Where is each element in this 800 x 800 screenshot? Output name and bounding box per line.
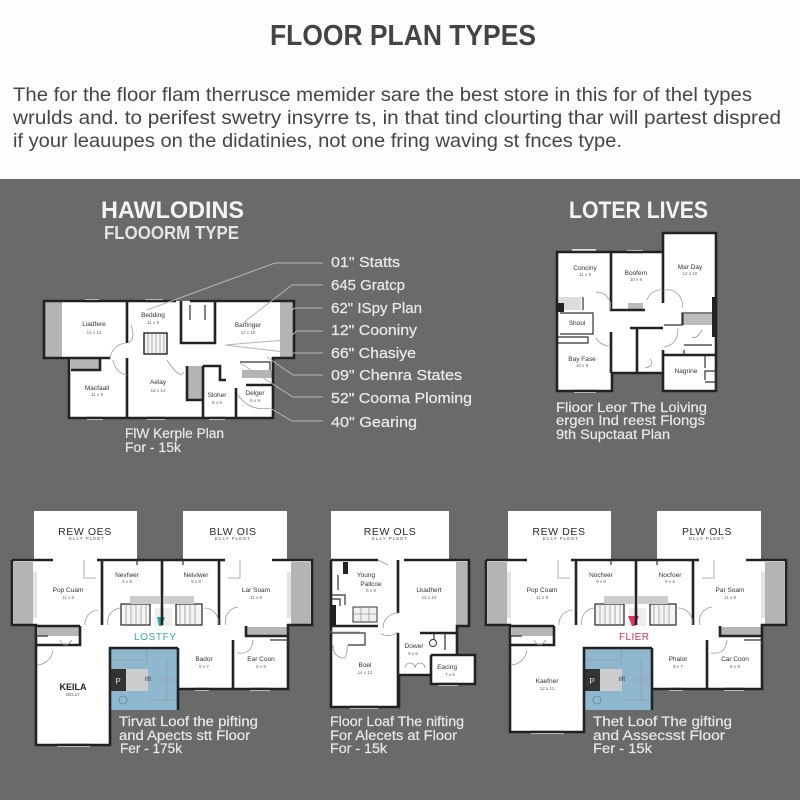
- floor plan: Loter Lives: Shoul: [569, 320, 586, 327]
- caption: Loter Lives plan: Flioor Leor The Loiving: [556, 400, 707, 415]
- floor plan: Lostfy double: Pop Cuam: [53, 587, 83, 594]
- floor plan: Loter Lives: Nagrine: [675, 368, 698, 375]
- floor plan: Pewols single: Young: [357, 572, 375, 579]
- floor plan: Hawlodins: 14 x 12: [87, 330, 102, 335]
- floor plan: Hawlodins: Macfaall: [85, 385, 110, 392]
- caption: Pewols plan: [330, 714, 464, 756]
- floor plan: Flier double: ELLY PLEET: [689, 536, 725, 541]
- floor plan: Flier double: REW DES: [532, 526, 586, 538]
- callout labels: 645 Gratcp: [331, 277, 405, 294]
- callout labels: 01" Statts: [331, 254, 400, 271]
- floor plan: Lostfy double: REW OES: [58, 526, 112, 538]
- callout labels: 52" Cooma Ploming: [331, 390, 472, 407]
- floor plan: Hawlodins: Sloher: [208, 392, 227, 399]
- floor plan: Pewols single: Eacing: [437, 664, 457, 671]
- intro text: if your leauupes on the didatinies, not one fring waving st fnces type.: [13, 130, 622, 152]
- floor plan: Hawlodins: [44, 299, 294, 420]
- callout labels: 09" Chenra States: [331, 367, 462, 384]
- caption: Lostfy plan: Fer - 175k: [120, 741, 182, 756]
- intro text: The for the floor flam therrusce memider sare the best store in this for of thel types: [13, 84, 752, 106]
- floor plan: Flier double: Phalor: [669, 656, 688, 663]
- floor plan: Lostfy double: KEILA: [60, 682, 87, 692]
- intro text: [12, 84, 781, 152]
- floor plan: Loter Lives: Bay Fase: [568, 356, 596, 363]
- floor plan: Flier double: 9 x 8: [596, 579, 606, 584]
- floor plan: Loter Lives: Boofern: [625, 270, 648, 277]
- caption: Hawlodins plan: FlW Kerple Plan: [125, 426, 224, 441]
- caption: Pewols plan: For - 15k: [330, 741, 387, 756]
- callout labels: 62" ISpy Plan: [331, 300, 422, 317]
- floor plan: Flier double: Pop Coam: [527, 587, 557, 594]
- floor plan: Pewols single: ELLY PLEET: [372, 536, 408, 541]
- floor plan: Flier double: ELLY PLEET: [543, 536, 579, 541]
- floor plan: Lostfy double: [12, 511, 312, 747]
- floor plan: Hawlodins: Aelay: [150, 379, 167, 386]
- caption: Flier plan: Fer - 15k: [593, 741, 652, 756]
- floor plan: Hawlodins: 12 x 14: [151, 388, 166, 393]
- floor plan: Loter Lives: [557, 233, 716, 393]
- floor plan: Lostfy double: 8 x 9: [256, 664, 266, 669]
- heading: Loter Lives: LOTER LIVES: [569, 197, 708, 224]
- floor plan: Loter Lives: 10 x 9: [576, 363, 589, 368]
- caption: Lostfy plan: [119, 714, 258, 756]
- caption: Flier plan: Thet Loof The gifting: [593, 714, 732, 729]
- floor plan: Flier double: 8 x 7: [673, 664, 683, 669]
- floor plan: Pewols single: Dower: [405, 643, 424, 650]
- caption: Loter Lives plan: 9th Supctaat Plan: [556, 427, 670, 442]
- floor plan: Pewols single: REW OLS: [364, 526, 416, 538]
- floor plan: Flier double: 11 x 9: [724, 595, 736, 600]
- icon: red marker: [628, 616, 639, 626]
- floor plan: Flier double: PLW OLS: [682, 526, 732, 538]
- callout lines: [147, 263, 323, 421]
- floor plan: Flier double: 8 x 9: [730, 664, 740, 669]
- floor plan: Flier double: Nocfwer: [589, 572, 614, 579]
- floor plan: Hawlodins: 8 x 6: [212, 400, 222, 405]
- caption: Pewols plan: For Alecets at Floor: [330, 728, 458, 743]
- floor plan: Flier double: 12 x 11: [540, 686, 555, 691]
- label: Flier: FLIER: [619, 632, 649, 643]
- floor plan: Pewols single: Pallcoe: [360, 581, 382, 588]
- caption: Loter Lives plan: [556, 400, 707, 442]
- floor plan: Pewols single: 8 x 6: [408, 651, 418, 656]
- floor plan: Hawlodins: 8 x 9: [250, 398, 260, 403]
- floor plan: Flier double: 11 x 9: [536, 595, 548, 600]
- floor plan: Lostfy double: Bador: [195, 656, 214, 663]
- floor plan: Lostfy double: BLW OIS: [209, 526, 257, 538]
- floor plan: Hawlodins: Delger: [245, 390, 265, 397]
- floor plan: Flier double: [486, 511, 786, 734]
- floor plan: Loter Lives: Conclny: [573, 265, 597, 272]
- caption: Lostfy plan: Tirvat Loof the pifting: [119, 714, 258, 729]
- floor plan: Lostfy double: BELLY: [66, 692, 80, 697]
- floor plan: Lostfy double: 9 x 8: [122, 579, 132, 584]
- floor plan: Hawlodins: 12 x 10: [241, 330, 256, 335]
- icon: teal marker: [157, 617, 165, 626]
- floor plan: Flier double: Kaefner: [536, 678, 559, 685]
- title: FLOOR PLAN TYPES: [270, 20, 536, 52]
- floor plan: Lostfy double: 8 x 7: [199, 664, 209, 669]
- floor plan: Loter Lives: 10 x 9: [630, 277, 643, 282]
- caption: Lostfy plan: and Apects stt Floor: [119, 728, 251, 743]
- floor plan: Hawlodins: Bedding: [141, 312, 165, 319]
- floor plan: Pewols single: 14 x 12: [358, 670, 373, 675]
- intro text: wrulds and. to perifest swetry insyrre ts, in that tind clourting thar will partest dispred: [12, 107, 781, 129]
- floor plan: Lostfy double: Neivlwer: [184, 572, 209, 579]
- floor plan: Pewols single: 12 x 10: [422, 595, 437, 600]
- caption: Flier plan: and Assecsst Floor: [593, 728, 726, 743]
- floor plan: Lostfy double: 11 x 9: [250, 595, 262, 600]
- floor plan: Lostfy double: P: [115, 677, 121, 686]
- caption: Loter Lives plan: ergen Ind reest Flongs: [556, 413, 705, 428]
- floor plan: Flier double: 9 x 8: [665, 579, 675, 584]
- label: Lostfy: LOSTFY: [134, 632, 176, 643]
- floor plan: Pewols single: [330, 511, 475, 709]
- callout labels: 12" Cooniny: [331, 322, 418, 339]
- caption: Flier plan: [593, 714, 732, 756]
- floor plan: Flier double: Car Coon: [721, 656, 749, 663]
- floor plan: Lostfy double: Lar Soam: [242, 587, 270, 594]
- callout labels: 66" Chasiye: [331, 345, 416, 362]
- heading: Hawlodins floor type: HAWLODINS: [101, 197, 244, 224]
- heading: Hawlodins floor type: FLOOORM TYPE: [104, 223, 239, 243]
- callout labels: 40" Gearing: [331, 414, 417, 431]
- floor plan: Flier double: P: [589, 677, 595, 686]
- floor plan: Pewols single: Lkadhert: [416, 587, 442, 594]
- floor plan: Pewols single: 7 x 6: [445, 672, 455, 677]
- floor plan: Flier double: Par Soam: [716, 587, 744, 594]
- floor plan: Lostfy double: 11 x 9: [62, 595, 74, 600]
- floor plan: Loter Lives: Mar Day: [678, 264, 703, 271]
- caption: Pewols plan: Floor Loaf The nifting: [330, 714, 464, 729]
- floor plan: Loter Lives: 12 x 10: [683, 271, 698, 276]
- floor plan: Hawlodins: Liadfere: [82, 321, 106, 328]
- floor plan: Hawlodins: Barfinger: [235, 322, 262, 329]
- floor plan: Pewols single: Boel: [358, 662, 372, 669]
- callout labels: [331, 254, 472, 431]
- caption: Hawlodins plan: [125, 426, 224, 455]
- floor plan: Lostfy double: 9 x 8: [191, 579, 201, 584]
- floor plan: Lostfy double: Ear Coon: [247, 656, 275, 663]
- floor plan: Lostfy double: lift: [145, 677, 151, 683]
- floor plan: Hawlodins: 11 x 9: [147, 320, 159, 325]
- floor plan: Loter Lives: 11 x 9: [579, 272, 591, 277]
- floor plan: Hawlodins: 11 x 9: [91, 392, 103, 397]
- floor plan: Lostfy double: Nevfwer: [115, 572, 140, 579]
- floor plan: Lostfy double: ELLY PLEET: [215, 536, 251, 541]
- floor plan: Flier double: Nocfoer: [659, 572, 682, 579]
- floor plan: Flier double: lift: [619, 677, 625, 683]
- floor plan: Pewols single: 8 x 9: [366, 588, 376, 593]
- floor plan: Lostfy double: ELLY PLEET: [69, 536, 105, 541]
- caption: Hawlodins plan: For - 15k: [125, 440, 181, 455]
- heading: Hawlodins floor type: [101, 197, 244, 243]
